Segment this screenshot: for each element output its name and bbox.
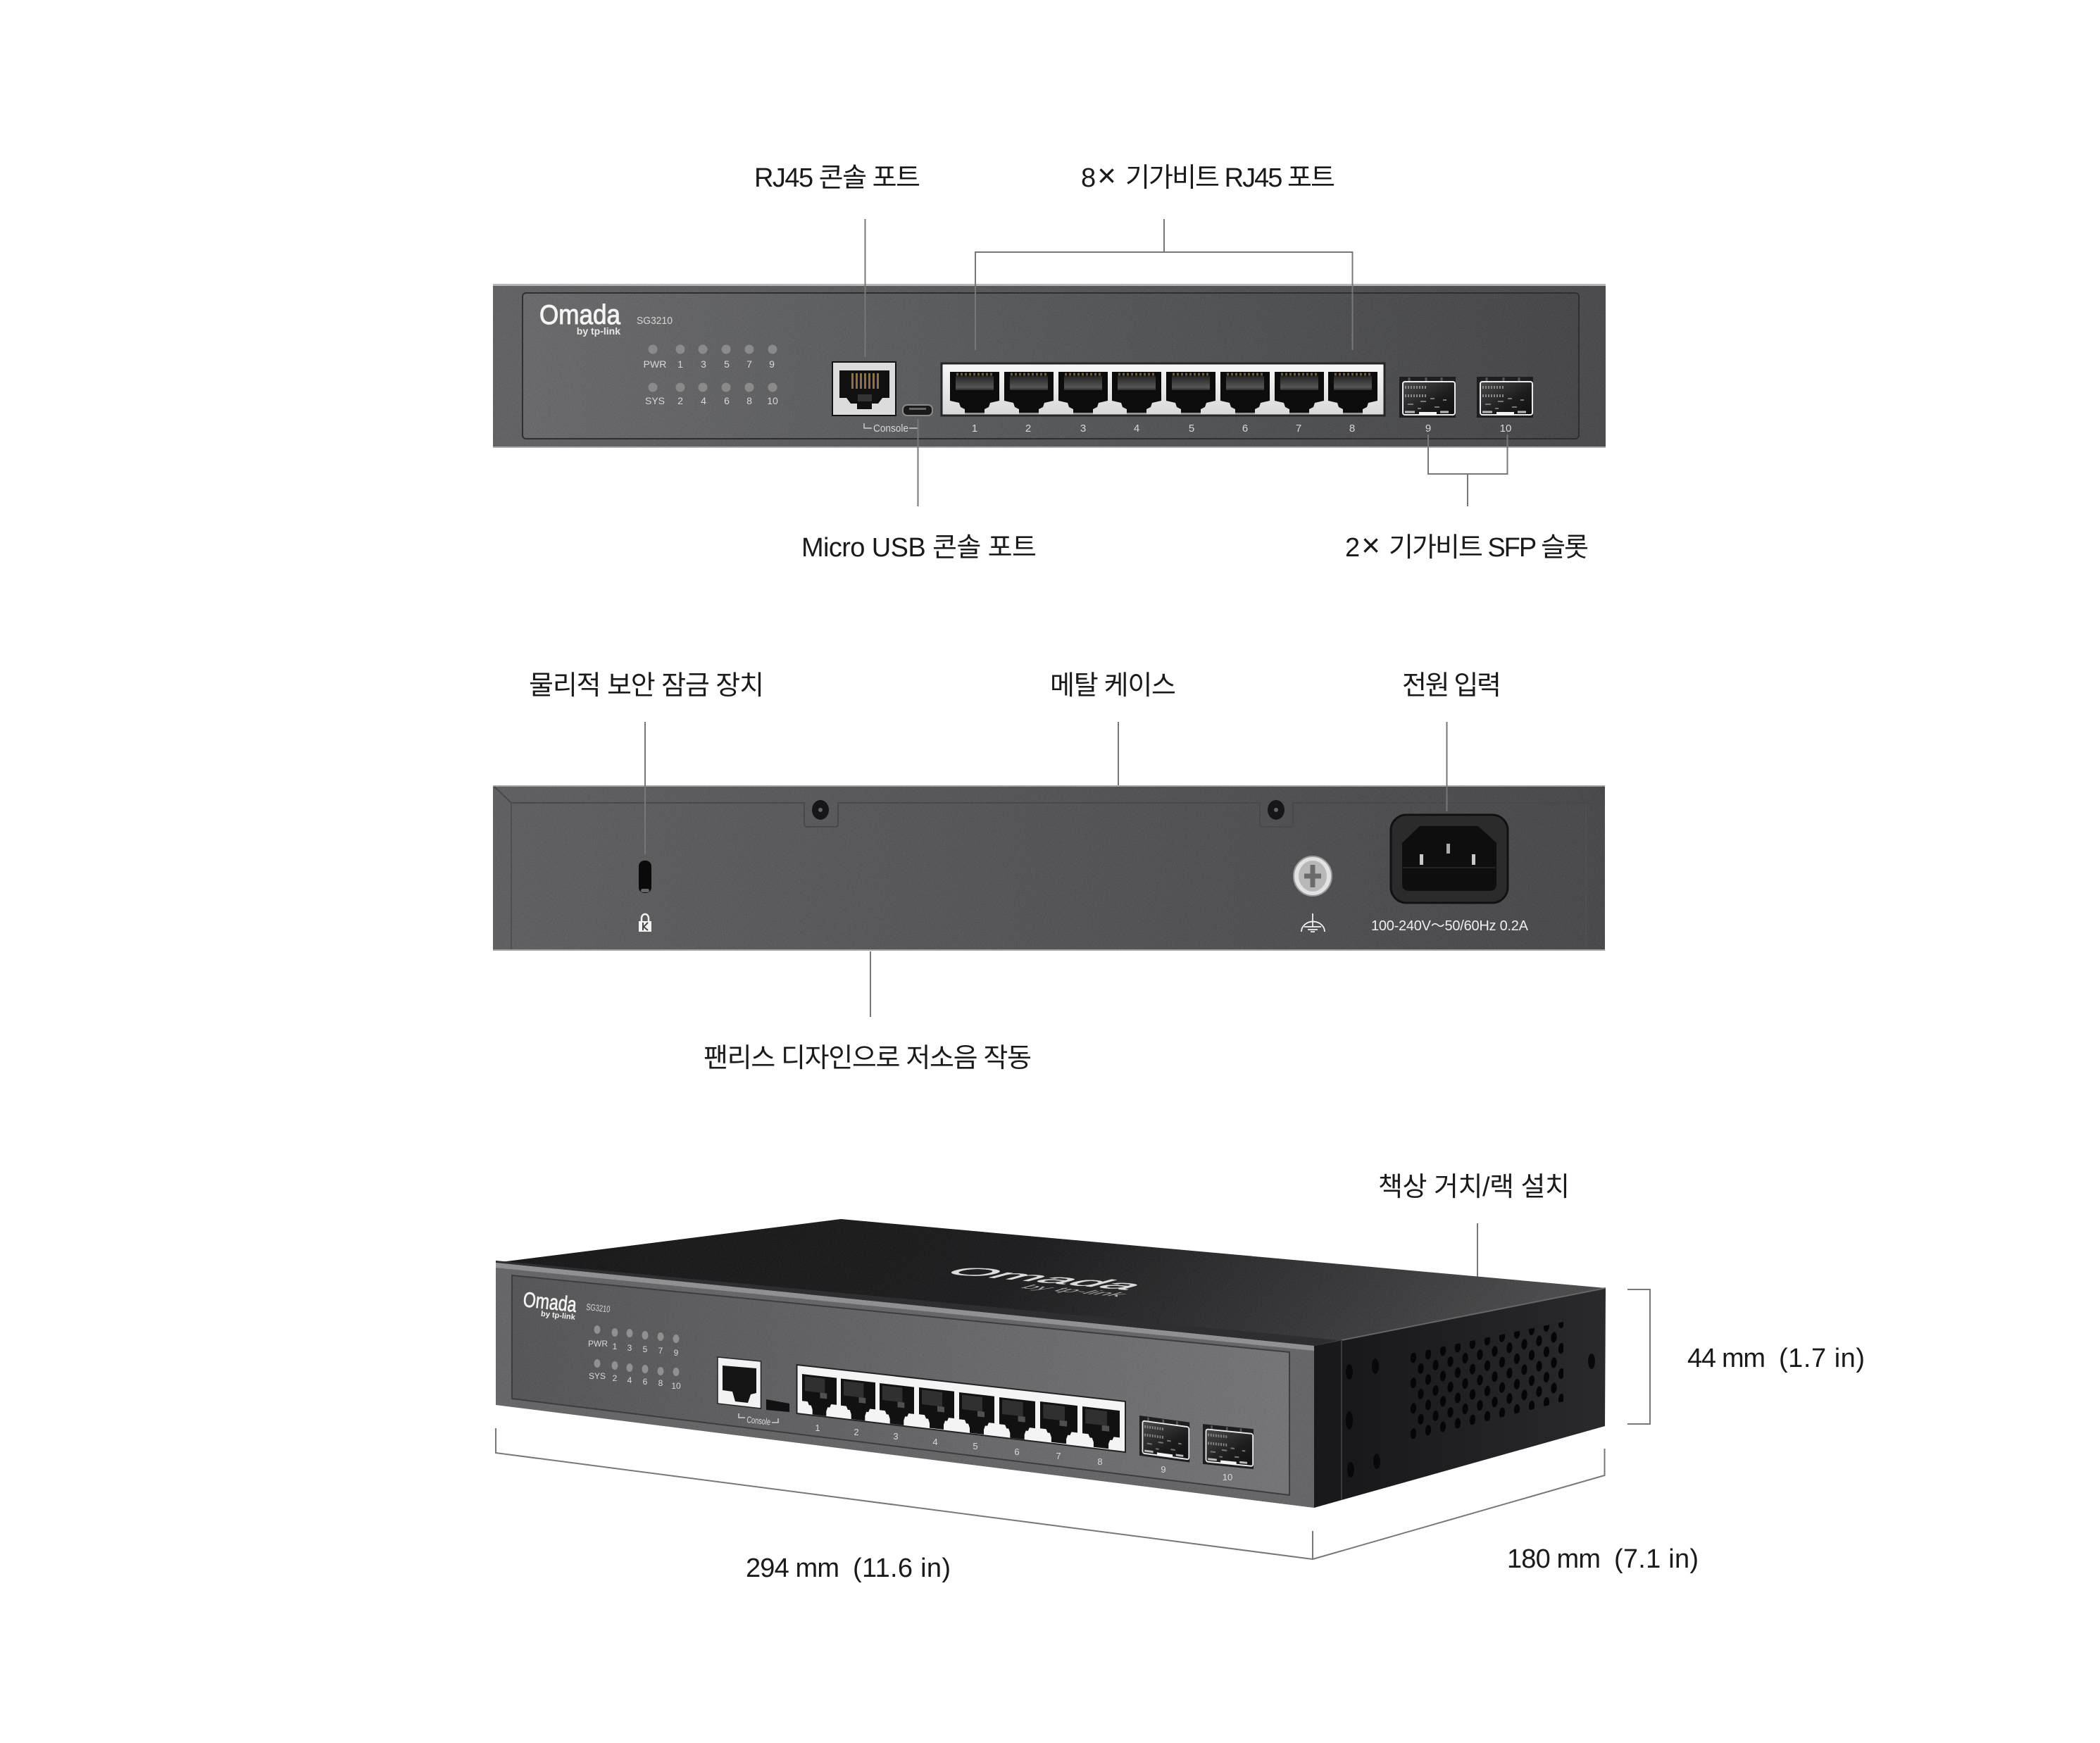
LED indicators: 3 xyxy=(701,358,706,370)
LED indicators: 5 xyxy=(724,358,730,370)
top logo: by tp-link xyxy=(1015,1283,1135,1298)
grounding screw xyxy=(1294,856,1332,896)
side mounting holes xyxy=(1346,1354,1595,1478)
3D port numbers: 10 xyxy=(1223,1472,1232,1482)
3D LED labels: 7 xyxy=(658,1346,663,1356)
LED indicators: PWR xyxy=(644,358,666,370)
callout lines: front view xyxy=(865,219,1507,506)
label: fanless silent design: 팬리스 디자인으로 저소음 작동 xyxy=(704,1044,1032,1073)
SFP slot 10 xyxy=(1477,377,1533,418)
3D SFP slot 9 xyxy=(1139,1416,1189,1462)
port numbers: 8 xyxy=(1349,423,1355,435)
3D port numbers: 5 xyxy=(973,1441,978,1451)
front chassis xyxy=(493,284,1606,448)
LED indicators: 6 xyxy=(724,395,730,406)
LED indicators: 9 xyxy=(769,358,775,370)
panel: 3D perspective view xyxy=(496,1219,1606,1508)
label: depth xyxy=(1507,1544,1699,1574)
Kensington lock slot xyxy=(639,861,651,893)
top face texture xyxy=(496,1219,1606,1346)
3D logo: Omada xyxy=(522,1288,578,1317)
power socket xyxy=(1391,815,1508,903)
inner front plate xyxy=(512,1275,1289,1495)
3D LED labels: 2 xyxy=(613,1373,618,1383)
3D port numbers: 4 xyxy=(932,1437,938,1447)
label: power input: 전원 입력 xyxy=(1402,671,1501,701)
label: 2x gigabit SFP slots: 2× xyxy=(1345,527,1380,563)
port numbers xyxy=(972,423,1511,435)
label: width: 294 mm xyxy=(746,1554,839,1583)
port numbers: 1 xyxy=(972,423,977,435)
label: 8x gigabit RJ45 ports: 8× xyxy=(1081,157,1116,194)
8 gigabit RJ45 port block xyxy=(942,363,1385,416)
3D LED labels: 9 xyxy=(674,1348,679,1358)
side face xyxy=(1342,1288,1606,1500)
3D LED labels: 8 xyxy=(658,1378,663,1388)
icon: ground symbol xyxy=(1301,913,1325,932)
3D LED labels: PWR xyxy=(588,1339,608,1349)
callout line: desktop/rack xyxy=(1477,1223,1478,1277)
label: width xyxy=(746,1554,951,1583)
rear chassis xyxy=(493,785,1605,951)
corner strip xyxy=(1314,1340,1342,1508)
3D console text: Console xyxy=(746,1414,771,1427)
3D port numbers: 9 xyxy=(1161,1464,1166,1475)
3D model name: SG3210 xyxy=(586,1301,611,1315)
rear texture xyxy=(493,785,1605,951)
3D port numbers: 3 xyxy=(893,1431,899,1442)
3D port numbers: 1 xyxy=(815,1423,820,1433)
label: depth: 180 mm xyxy=(1507,1544,1601,1574)
vent holes xyxy=(1410,1322,1563,1441)
3D SFP slot 10 xyxy=(1203,1424,1254,1469)
port numbers: 3 xyxy=(1080,423,1086,435)
3D LEDs xyxy=(594,1325,679,1376)
3D LED labels xyxy=(588,1339,681,1391)
3D console port xyxy=(718,1357,761,1408)
port numbers: 6 xyxy=(1242,423,1248,435)
LED indicators: 2 xyxy=(677,395,683,406)
top logo xyxy=(916,1265,1171,1298)
3D console text xyxy=(739,1413,778,1427)
label: width: (11.6 in) xyxy=(853,1554,951,1583)
port numbers: 5 xyxy=(1189,423,1194,435)
port numbers: 10 xyxy=(1500,423,1511,435)
LED indicators: 1 xyxy=(677,358,683,370)
label: metal case: 메탈 케이스 xyxy=(1050,671,1176,701)
callout lines: rear view xyxy=(645,722,1446,1017)
label: 8x gigabit RJ45 ports xyxy=(1081,157,1335,194)
3D port numbers xyxy=(815,1423,1232,1482)
label: 2x gigabit SFP slots: 기가비트 SFP 슬롯 xyxy=(1389,533,1589,563)
label: RJ45 console port: RJ45 콘솔 포트 xyxy=(754,163,920,193)
front face xyxy=(496,1263,1314,1508)
label: 2x gigabit SFP slots xyxy=(1345,527,1589,563)
panel: rear view of switch xyxy=(493,785,1605,951)
port numbers: 7 xyxy=(1296,423,1301,435)
3D micro USB xyxy=(766,1399,789,1412)
inner face plate xyxy=(523,293,1579,439)
3D LED labels: 6 xyxy=(643,1377,648,1387)
label: desktop/rack mount: 책상 거치/랙 설치 xyxy=(1378,1173,1570,1202)
LED indicators: SYS xyxy=(645,395,665,406)
logo: Omada by tp-link: by tp-link xyxy=(577,325,620,337)
LED indicators: 10 xyxy=(767,395,778,406)
logo: Omada by tp-link: Omada xyxy=(539,300,620,330)
LED indicators: 8 xyxy=(746,395,752,406)
3D LED labels: 5 xyxy=(643,1344,648,1354)
power rating: 100-240V～50/60Hz 0.2A xyxy=(1371,918,1529,934)
3D logo: by tp-link xyxy=(540,1310,576,1322)
label: height xyxy=(1687,1344,1865,1373)
front texture xyxy=(496,1263,1314,1508)
label: depth: (7.1 in) xyxy=(1614,1544,1699,1574)
top logo: Omada xyxy=(934,1265,1158,1292)
port numbers: 2 xyxy=(1025,423,1031,435)
top bevel xyxy=(496,1261,1338,1346)
3D LED labels: 1 xyxy=(613,1342,618,1351)
screw right xyxy=(1268,800,1285,820)
label: micro USB console port: Micro USB 콘솔 포트 xyxy=(801,533,1037,563)
3D LED labels: 4 xyxy=(627,1375,632,1385)
SFP slot 9 xyxy=(1399,377,1456,418)
screw left xyxy=(812,800,829,820)
port numbers: 4 xyxy=(1134,423,1139,435)
console text: Console xyxy=(873,423,908,435)
3D port numbers: 6 xyxy=(1014,1447,1020,1457)
panel: front view of switch xyxy=(493,284,1606,448)
top face xyxy=(496,1219,1606,1346)
3D LED labels: 3 xyxy=(627,1343,632,1353)
model name: SG3210 xyxy=(637,315,673,327)
texture overlay xyxy=(493,284,1606,448)
3D port numbers: 7 xyxy=(1056,1451,1061,1461)
dimension lines xyxy=(496,1289,1650,1559)
3D 8-port block xyxy=(797,1365,1125,1452)
label: height: 44 mm xyxy=(1687,1344,1765,1373)
port: RJ45 console xyxy=(832,362,896,416)
port numbers: 9 xyxy=(1425,423,1431,435)
icon: lock xyxy=(639,914,651,932)
label: height: (1.7 in) xyxy=(1779,1344,1865,1373)
port: micro USB xyxy=(903,405,932,416)
LED indicators xyxy=(644,345,778,406)
3D LED labels: SYS xyxy=(589,1371,606,1381)
3D LED labels: 10 xyxy=(671,1381,681,1391)
label: 8x gigabit RJ45 ports: 기가비트 RJ45 포트 xyxy=(1125,163,1335,193)
label: physical security lock: 물리적 보안 잠금 장치 xyxy=(529,671,764,701)
LED indicators: 4 xyxy=(701,395,706,406)
3D port numbers: 8 xyxy=(1097,1456,1103,1467)
3D port numbers: 2 xyxy=(854,1427,859,1437)
LED indicators: 7 xyxy=(746,358,752,370)
